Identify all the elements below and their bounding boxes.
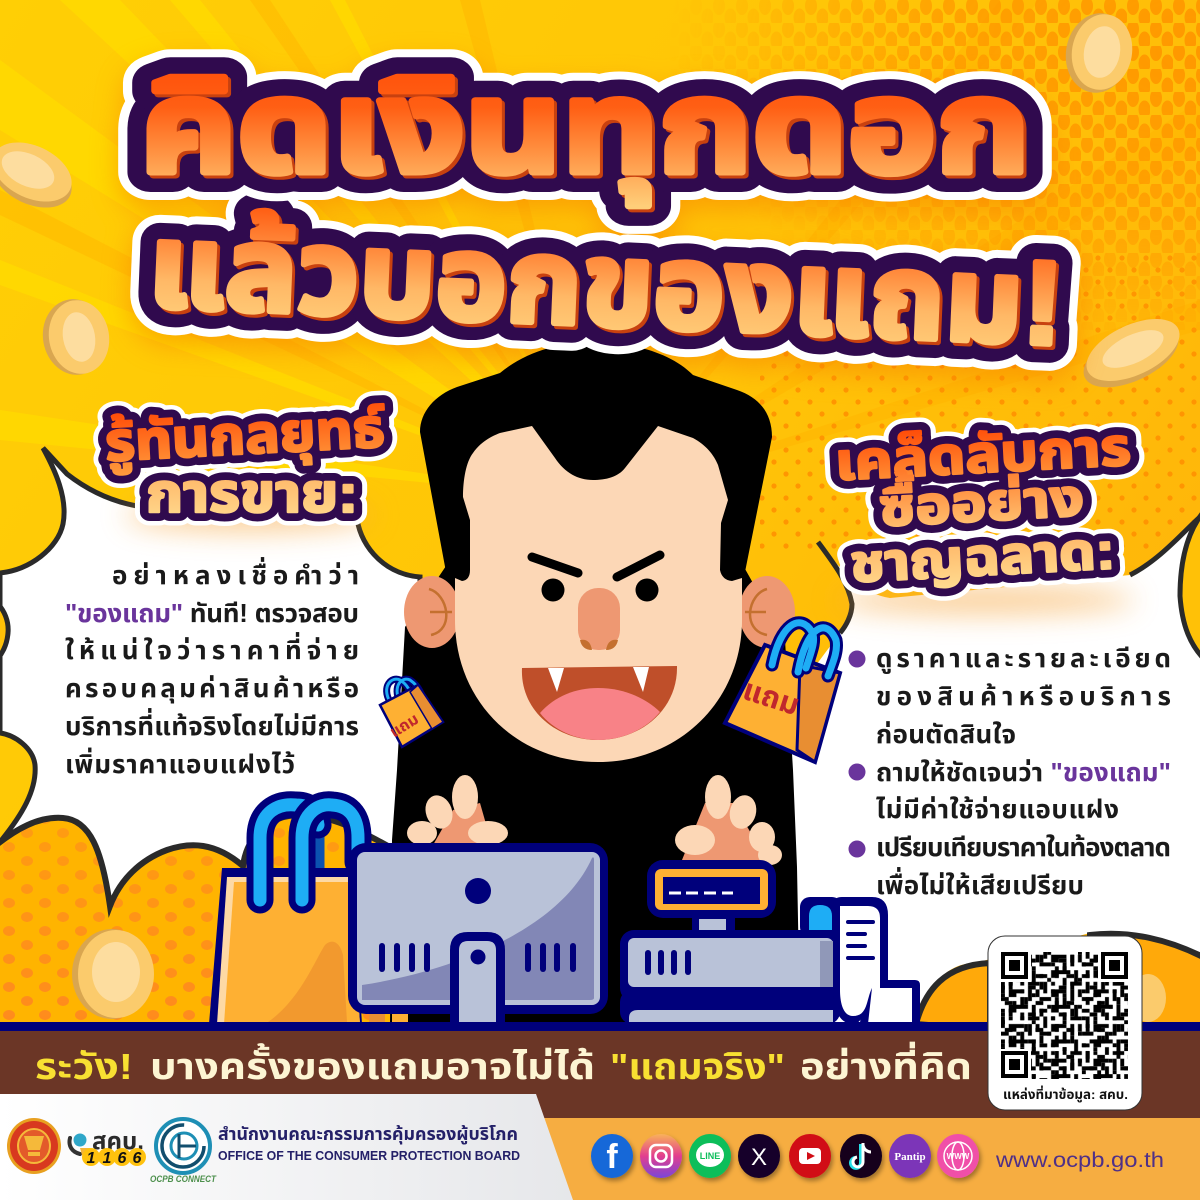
panel: right speech burst: [790, 510, 1200, 1030]
footer white panel: [0, 1094, 573, 1200]
text block: left advice: "ของแถม" ทันที! ตรวจสอบ: [65, 598, 359, 628]
heading: smart buying tips: เคล็ดลับการ: [834, 419, 1132, 492]
mouth with fangs: [522, 666, 677, 740]
icon: large shopping bag: [209, 805, 362, 1024]
organisation name: สำนักงานคณะกรรมการคุ้มครองผู้บริโภค: [218, 1124, 518, 1145]
bullet 1: [848, 643, 1171, 749]
heading: smart buying tips: ซื้ออย่าง: [877, 461, 1085, 538]
logo: OCPB connect: OCPB CONNECT: [150, 1174, 217, 1184]
icon: small gift bag: [380, 679, 443, 747]
bullet 3: เพื่อไม่ให้เสียเปรียบ: [876, 867, 1084, 900]
banner: warning strip: บางครั้งของแถมอาจไม่ได้: [150, 1042, 595, 1087]
icon: pantip: Pantip: [894, 1151, 926, 1163]
title shadow: คิดเงินทุกดอก: [140, 66, 1030, 218]
heading: smart buying tips: ซื้ออย่าง: [877, 461, 1085, 538]
coin top right: [1060, 8, 1138, 98]
icon: pantip: [889, 1134, 931, 1178]
face: [455, 426, 742, 762]
heading: smart buying tips: ชาญฉลาด:: [849, 522, 1116, 594]
title line 1: คิดเงินทุกดอก: [140, 54, 1030, 206]
heading: sales tactics: การขาย:: [146, 464, 358, 524]
bullet 2: ถามให้ชัดเจนว่า "ของแถม": [876, 757, 1171, 787]
heading: sales tactics: รู้ทันกลยุทธ์: [103, 398, 386, 475]
bullet 1: ก่อนตัดสินใจ: [876, 719, 1016, 749]
icon: website globe: WWW: [947, 1152, 970, 1161]
title shadow: แล้วบอกของแถม!: [146, 210, 1066, 380]
brows and eyes: [532, 555, 660, 602]
banner: warning strip: อย่างที่คิด: [800, 1041, 972, 1087]
panel: left speech burst: [0, 448, 420, 906]
heading: smart buying tips: ซื้ออย่าง: [877, 461, 1085, 538]
logo: OCPB hotline 1166: [69, 1128, 146, 1167]
icon: facebook: f: [606, 1138, 618, 1176]
left hand: [407, 775, 508, 845]
icon: gift bag on right: [725, 623, 840, 762]
footer orange strip: [530, 1118, 1200, 1200]
title line 1: คิดเงินทุกดอก: [143, 57, 1033, 209]
title line 2: แล้วบอกของแถม!: [146, 200, 1066, 370]
title: [140, 54, 1069, 373]
heading shadow glow: [125, 499, 1135, 614]
heading: sales tactics: การขาย:: [146, 464, 358, 524]
title line 1: คิดเงินทุกดอก: [140, 54, 1030, 206]
heading: sales tactics: [103, 398, 386, 524]
text block: left advice: ครอบคลุมค่าสินค้าหรือ: [65, 673, 359, 704]
icon: small gift bag: แถม: [387, 711, 422, 741]
icon: cash register: [620, 860, 920, 1024]
heading: smart buying tips: [834, 419, 1132, 594]
body: [390, 560, 800, 1024]
QR code card: แหล่งที่มาข้อมูล: สคบ.: [1003, 1085, 1128, 1103]
panel: bottom-left halftone area: [0, 815, 400, 1030]
icon: instagram: [640, 1134, 682, 1178]
icon: gift bag on right: แถม: [739, 673, 803, 722]
bullet 3: [848, 832, 1171, 900]
list: right buying tips: [848, 643, 1171, 900]
title line 2: แล้วบอกของแถม!: [146, 200, 1066, 370]
logo: OCPB hotline 1166: 1: [103, 1150, 112, 1167]
title line 2: แล้วบอกของแถม!: [146, 200, 1066, 370]
icon: website globe: [937, 1134, 979, 1178]
logo: OCPB hotline 1166: 6: [118, 1150, 127, 1167]
character: vampire seller: [390, 342, 800, 1024]
coin left upper: [0, 131, 81, 219]
icon: youtube: [789, 1134, 831, 1178]
logo: OCPB hotline 1166: 6: [133, 1150, 142, 1167]
icon: line: LINE: [700, 1151, 720, 1161]
bullet 3: เปรียบเทียบราคาในท้องตลาด: [876, 832, 1171, 862]
ears: [404, 576, 795, 648]
heading: smart buying tips: เคล็ดลับการ: [834, 419, 1132, 492]
title line 1: คิดเงินทุกดอก: [140, 54, 1030, 206]
icon: line: [689, 1134, 731, 1178]
icon: tiktok: [840, 1134, 882, 1178]
heading: sales tactics: รู้ทันกลยุทธ์: [103, 398, 386, 475]
heading: smart buying tips: เคล็ดลับการ: [834, 419, 1132, 492]
organisation name: OFFICE OF THE CONSUMER PROTECTION BOARD: [218, 1148, 520, 1163]
bullet 2: ไม่มีค่าใช้จ่ายแอบแฝง: [876, 794, 1119, 824]
title shadow: [140, 66, 1066, 380]
hair: [420, 342, 772, 582]
logo: OCPB hotline 1166: สคบ.: [92, 1128, 144, 1155]
text block: left advice: เพิ่มราคาแอบแฝงไว้: [65, 748, 295, 779]
icon: computer monitor: [348, 843, 608, 1024]
website url: www.ocpb.go.th: [995, 1149, 1164, 1172]
banner: warning strip: ระวัง!: [35, 1046, 133, 1087]
banner: warning strip: [0, 1022, 1200, 1119]
coin right: [1074, 306, 1189, 400]
panel: bottom-right burst scallops: [916, 934, 1200, 1030]
icon: X: X: [751, 1144, 767, 1171]
QR code card: [988, 936, 1142, 1110]
text block: left advice: อย่าหลงเชื่อคำว่า: [112, 557, 359, 590]
coin left lower: [37, 294, 115, 380]
title line 2: แล้วบอกของแถม!: [149, 203, 1069, 373]
banner: warning strip: "แถมจริง": [610, 1046, 785, 1087]
nose: [578, 588, 620, 650]
heading: sales tactics: การขาย:: [146, 464, 358, 524]
coin bottom left: [72, 929, 154, 1019]
heading: sales tactics: รู้ทันกลยุทธ์: [103, 398, 386, 475]
logo: OCPB connect: [150, 1119, 217, 1184]
icon: facebook: [591, 1134, 633, 1178]
logo: government seal: [7, 1118, 61, 1174]
organisation name: [218, 1124, 520, 1163]
text block: left advice: [65, 557, 359, 779]
social icons row: [591, 1134, 979, 1178]
text block: left advice: บริการที่แท้จริงโดยไม่มีการ: [65, 708, 359, 741]
bullet 1: ของสินค้าหรือบริการ: [876, 681, 1171, 711]
text block: left advice: ให้แน่ใจว่าราคาที่จ่าย: [65, 632, 359, 665]
heading: smart buying tips: ชาญฉลาด:: [849, 522, 1116, 594]
heading: smart buying tips: ชาญฉลาด:: [849, 522, 1116, 594]
logo: OCPB hotline 1166: 1: [87, 1150, 96, 1167]
bullet 1: ดูราคาและรายละเอียด: [876, 643, 1171, 674]
bullet 2: [848, 757, 1171, 824]
right hand: [675, 775, 782, 865]
icon: X: [738, 1134, 780, 1178]
